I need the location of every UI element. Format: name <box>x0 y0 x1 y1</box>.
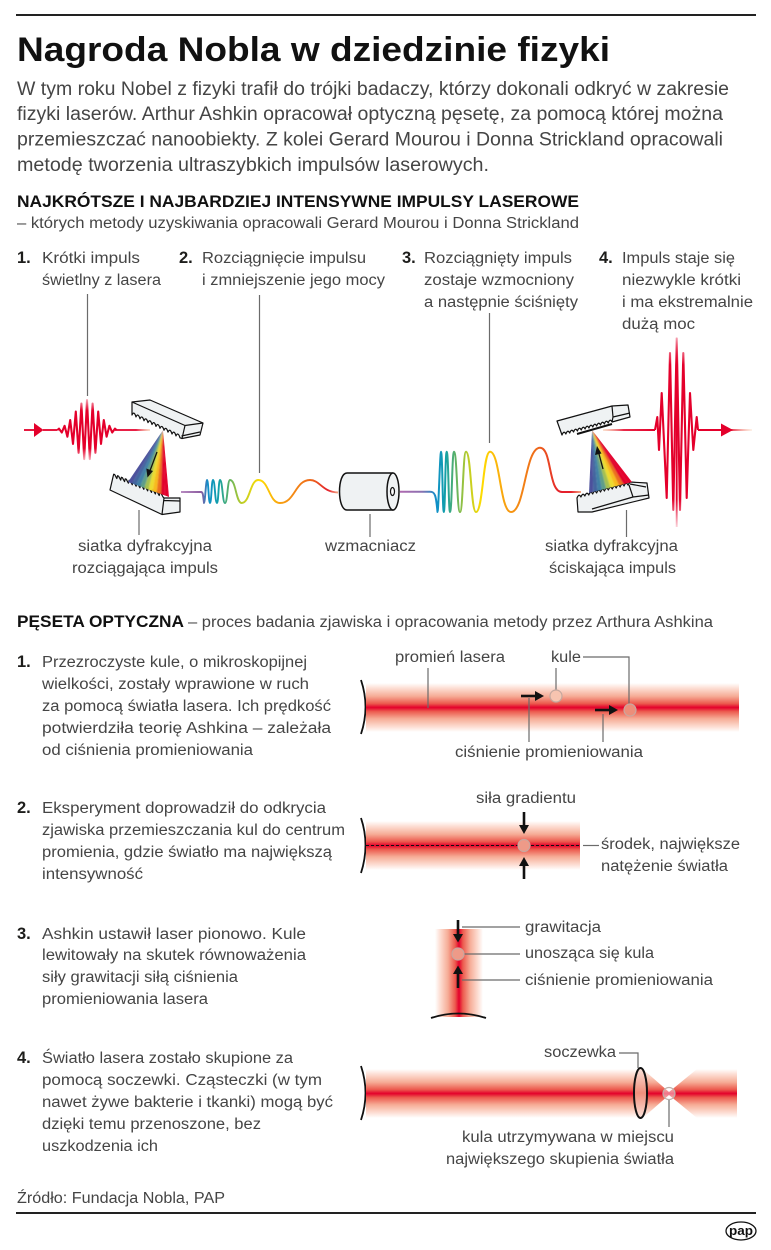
diagram 3: levitating sphere: grawitacja <box>525 919 601 936</box>
diagram 4: focused beam with lens: kula utrzymywana w miejscu <box>462 1129 674 1146</box>
step 1 label: 1. <box>17 249 31 267</box>
step 1 label: Krótki impuls <box>42 250 140 267</box>
tweezers step 3 text <box>17 925 306 1008</box>
caption: compressing grating <box>545 538 678 577</box>
tweezers step 1 text: wielkości, zostały wprawione w ruch <box>41 676 309 693</box>
diagram 3: levitating sphere <box>431 919 713 1018</box>
tweezers step 3 text: 3. <box>17 925 31 943</box>
tweezers step 4 text: uszkodzenia ich <box>42 1138 158 1155</box>
step 3 label <box>402 249 578 311</box>
section heading: optical tweezers <box>17 613 713 631</box>
tweezers step 2 text <box>17 799 345 883</box>
diagram 4: focused beam with lens: największego skupienia światła <box>446 1151 674 1168</box>
step 2 label <box>179 249 385 289</box>
title: Nagroda Nobla w dziedzinie fizyki <box>17 31 610 69</box>
icon: PAP logo <box>726 1222 756 1240</box>
tweezers step 2 text: 2. <box>17 799 31 817</box>
step 1 label <box>17 249 161 289</box>
tweezers step 1 text: Przezroczyste kule, o mikroskopijnej <box>42 654 307 671</box>
diagram 3: levitating sphere: ciśnienie promieniowania <box>525 972 713 989</box>
diagram 2: gradient force: środek, największe <box>601 836 740 853</box>
intro text block <box>17 79 729 176</box>
top rule <box>16 14 756 16</box>
tweezers step 2 text: intensywność <box>42 866 143 883</box>
caption: stretching grating <box>72 538 218 577</box>
diagram 2: gradient force: natężenie światła <box>601 858 728 875</box>
amplified rainbow pulse <box>400 448 581 512</box>
tweezers step 3 text: siły grawitacji siłą ciśnienia <box>42 969 238 986</box>
source: Źródło: Fundacja Nobla, PAP <box>17 1190 225 1207</box>
step 2 label: 2. <box>179 249 193 267</box>
section heading: optical tweezers: – proces badania zjawiska i opracowania metody przez Arthura Ashkina <box>188 614 713 631</box>
tweezers step 4 text: nawet żywe bakterie i tkanki) mogą być <box>42 1094 333 1111</box>
compressing diffraction grating <box>557 405 650 512</box>
caption: stretching grating: siatka dyfrakcyjna <box>78 538 212 555</box>
section heading: optical tweezers: PĘSETA OPTYCZNA <box>17 613 184 631</box>
tweezers step 4 text: 4. <box>17 1049 31 1067</box>
tweezers step 4 text: pomocą soczewki. Cząsteczki (w tym <box>42 1072 322 1089</box>
step 4 label: i ma ekstremalnie <box>622 294 753 311</box>
diagram 1: radiation pressure: kule <box>551 649 581 666</box>
tweezers step 4 text <box>17 1049 333 1155</box>
intro text block: metodę tworzenia ultraszybkich impulsów laserowych. <box>17 155 489 176</box>
caption: stretching grating: rozciągająca impuls <box>72 560 218 577</box>
icon: PAP logo: pap <box>729 1223 753 1238</box>
tweezers step 3 text: Ashkin ustawił laser pionowo. Kule <box>42 926 306 943</box>
leader lines of pulse diagram <box>88 294 626 537</box>
tweezers step 1 text: od ciśnienia promieniowania <box>42 742 253 759</box>
amplifier cylinder <box>340 473 399 510</box>
section heading: laser pulses <box>17 192 579 232</box>
output high power pulse <box>603 338 752 527</box>
step 4 label: Impuls staje się <box>622 250 735 267</box>
step 2 label: i zmniejszenie jego mocy <box>202 272 385 289</box>
section heading: laser pulses: NAJKRÓTSZE I NAJBARDZIEJ INTENSYWNE IMPULSY LASEROWE <box>17 192 579 211</box>
section heading: laser pulses: – których metody uzyskiwania opracowali Gerard Mourou i Donna Strickland <box>17 215 579 232</box>
caption: amplifier: wzmacniacz <box>324 538 416 555</box>
short input pulse <box>24 400 150 459</box>
stretching diffraction grating <box>110 400 203 514</box>
diagram 1: radiation pressure <box>361 649 739 761</box>
pulse diagram <box>24 338 752 527</box>
step 4 label: 4. <box>599 249 613 267</box>
step 2 label: Rozciągnięcie impulsu <box>202 250 366 267</box>
step 4 label <box>599 249 753 333</box>
diagram 3: levitating sphere: unosząca się kula <box>525 945 654 962</box>
tweezers step 3 text: promieniowania lasera <box>42 991 208 1008</box>
tweezers step 4 text: dzięki temu przenoszone, bez <box>42 1116 261 1133</box>
step 3 label: a następnie ściśnięty <box>424 294 578 311</box>
step 4 label: dużą moc <box>622 316 695 333</box>
caption: compressing grating: siatka dyfrakcyjna <box>545 538 678 555</box>
tweezers step 3 text: lewitowały na skutek równoważenia <box>42 947 306 964</box>
stretched rainbow pulse <box>181 480 338 503</box>
caption: compressing grating: ściskająca impuls <box>549 560 676 577</box>
step 3 label: 3. <box>402 249 416 267</box>
tweezers step 1 text: za pomocą światła lasera. Ich prędkość <box>42 698 331 715</box>
tweezers step 1 text <box>17 653 331 759</box>
tweezers step 1 text: 1. <box>17 653 31 671</box>
tweezers step 2 text: zjawiska przemieszczania kul do centrum <box>42 822 345 839</box>
step 4 label: niezwykle krótki <box>622 272 741 289</box>
intro text block: fizyki laserów. Arthur Ashkin opracował optyczną pęsetę, za pomocą której można <box>17 104 723 125</box>
step 1 label: świetlny z lasera <box>42 272 161 289</box>
diagram 4: focused beam with lens: soczewka <box>544 1044 616 1061</box>
step 3 label: zostaje wzmocniony <box>424 272 574 289</box>
tweezers step 2 text: Eksperyment doprowadził do odkrycia <box>42 800 326 817</box>
tweezers step 2 text: promienia, gdzie światło ma największą <box>42 844 332 861</box>
diagram 1: radiation pressure: promień lasera <box>395 649 505 666</box>
diagram 4: focused beam with lens <box>361 1044 737 1168</box>
diagram 1: radiation pressure: ciśnienie promieniowania <box>455 744 643 761</box>
bottom rule <box>16 1212 756 1214</box>
step 3 label: Rozciągnięty impuls <box>424 250 572 267</box>
diagram 2: gradient force: siła gradientu <box>476 790 576 807</box>
intro text block: W tym roku Nobel z fizyki trafił do trójki badaczy, którzy dokonali odkryć w zakresie <box>17 79 729 100</box>
tweezers step 1 text: potwierdziła teorię Ashkina – zależała <box>42 720 331 737</box>
tweezers step 4 text: Światło lasera zostało skupione za <box>42 1049 293 1067</box>
intro text block: przemieszczać nanoobiekty. Z kolei Gerard Mourou i Donna Strickland opracowali <box>17 130 723 150</box>
diagram 2: gradient force <box>361 790 740 879</box>
